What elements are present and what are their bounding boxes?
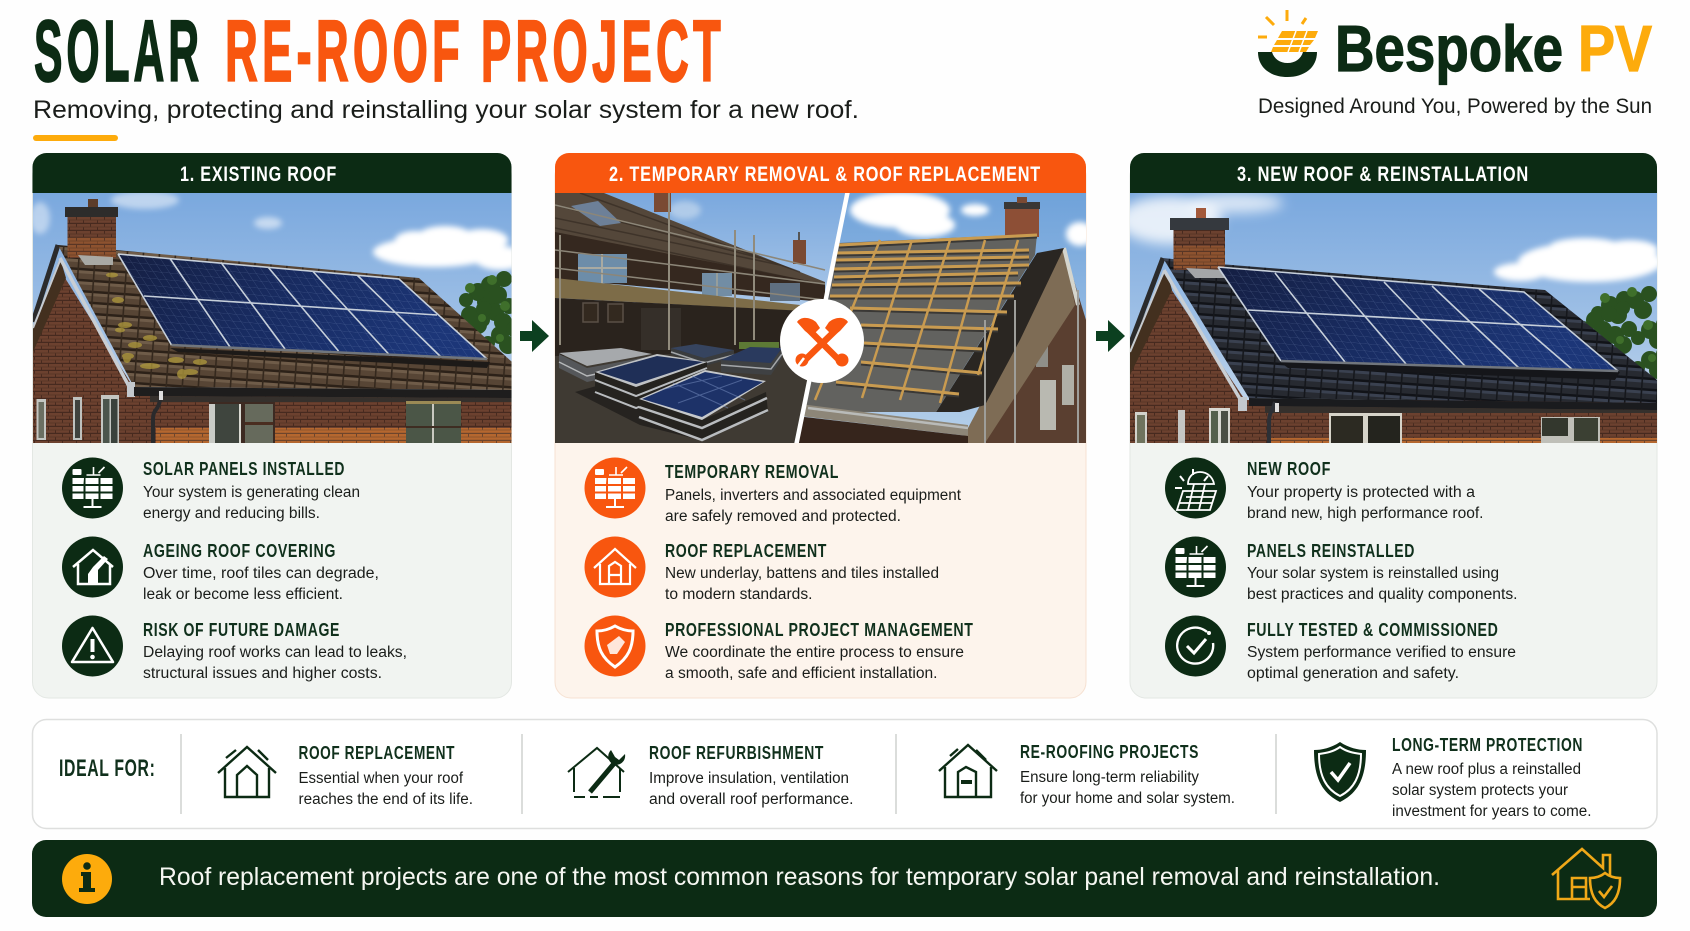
arrow: step 1 to 2 [520,320,549,352]
feature: risk of future damage [62,616,407,682]
panel 2: temporary removal and roof replacement [555,153,1094,698]
feature: roof replacement: to modern standards. [665,586,812,603]
panel 1 body [32,160,512,698]
item: long-term protection: solar system protects your [1392,782,1568,799]
accent bar [33,135,118,141]
feature: ageing roof covering: leak or become less efficient. [143,586,343,603]
feature: fully tested and commissioned: FULLY TESTED & COMMISSIONED [1247,620,1498,640]
item: roof refurbishment: Improve insulation, ventilation [649,770,849,787]
item: re-roofing projects [939,741,1235,807]
panel 3: new roof and reinstallation [1118,153,1672,698]
panel 1 header [32,153,512,193]
item: roof replacement: Essential when your roof [298,770,464,787]
photo: removal and new battens [555,190,1094,446]
panel 2 header [555,153,1086,193]
panel 1 header: 1. EXISTING ROOF [180,163,337,186]
ideal for label: IDEAL FOR: [59,755,156,782]
feature: temporary removal [584,458,962,525]
item: re-roofing projects: Ensure long-term reliability [1020,769,1199,786]
icon: info [62,854,112,904]
icon: crossed tools [796,318,848,366]
item: re-roofing projects: RE-ROOFING PROJECTS [1020,741,1199,762]
feature: ageing roof covering: Over time, roof tiles can degrade, [143,565,379,582]
shadows on the ground [576,386,694,438]
item: re-roofing projects: for your home and solar system. [1020,790,1235,807]
feature: fully tested and commissioned: System performance verified to ensure [1247,644,1516,661]
feature: solar panels installed: energy and reducing bills. [143,505,320,522]
features: panel 1 [62,458,407,682]
feature: new roof: NEW ROOF [1247,459,1331,479]
tagline: Designed Around You, Powered by the Sun [1258,95,1652,118]
icon: sun over panel [1258,10,1318,77]
banner message: Roof replacement projects are one of the most common reasons for temporary solar panel removal and reinstallation. [159,863,1440,891]
item: roof replacement: ROOF REPLACEMENT [298,742,455,763]
wordmark: PV [1578,12,1652,85]
info banner [32,840,1657,917]
feature: solar panels installed: Your system is generating clean [143,484,360,501]
feature: professional project management [584,616,974,682]
photo: new roof with panels reinstalled [1118,193,1672,443]
feature: risk of future damage: Delaying roof works can lead to leaks, [143,644,407,661]
title [34,3,725,100]
feature: panels reinstalled: PANELS REINSTALLED [1247,541,1415,561]
feature: panels reinstalled: best practices and quality components. [1247,586,1518,603]
panel 2 body [555,160,1086,698]
item: roof refurbishment: ROOF REFURBISHMENT [649,742,824,763]
panel 3 header [1130,153,1657,193]
features: panel 3 [1165,458,1518,682]
item: roof replacement [218,742,473,808]
panel 3 body [1130,160,1657,698]
feature: temporary removal: TEMPORARY REMOVAL [665,462,839,482]
panel 3 header: 3. NEW ROOF & REINSTALLATION [1237,163,1529,186]
feature: temporary removal: Panels, inverters and associated equipment [665,487,962,504]
feature: fully tested and commissioned [1165,616,1516,682]
features: panel 2 [584,458,974,682]
feature: new roof [1165,458,1484,522]
ideal for strip [32,720,1657,828]
feature: professional project management: We coordinate the entire process to ensure [665,644,964,661]
feature: panels reinstalled: Your solar system is reinstalled using [1247,565,1499,582]
photo: existing roof with solar panels [30,191,526,443]
feature: ageing roof covering: AGEING ROOF COVERING [143,541,336,561]
subtitle: Removing, protecting and reinstalling your solar system for a new roof. [33,96,859,124]
feature: professional project management: PROFESSIONAL PROJECT MANAGEMENT [665,620,974,640]
feature: roof replacement [584,536,939,603]
feature: ageing roof covering [62,536,379,603]
feature: risk of future damage: structural issues and higher costs. [143,665,382,682]
item: long-term protection: A new roof plus a reinstalled [1392,761,1581,778]
feature: new roof: Your property is protected with a [1247,484,1475,501]
item: long-term protection: investment for years to come. [1392,803,1592,820]
arrow: step 2 to 3 [1096,320,1125,352]
title: RE-ROOF PROJECT [225,3,725,100]
feature: risk of future damage: RISK OF FUTURE DAMAGE [143,620,340,640]
item: long-term protection [1314,734,1592,820]
feature: panels reinstalled [1165,536,1518,603]
feature: fully tested and commissioned: optimal generation and safety. [1247,665,1459,682]
feature: temporary removal: are safely removed and protected. [665,508,901,525]
icon: house with shield [1552,849,1620,908]
feature: solar panels installed [62,458,360,522]
feature: professional project management: a smooth, safe and efficient installation. [665,665,938,682]
feature: new roof: brand new, high performance roof. [1247,505,1484,522]
item: roof refurbishment: and overall roof performance. [649,791,854,808]
panel 2 header: 2. TEMPORARY REMOVAL & ROOF REPLACEMENT [609,163,1041,186]
feature: roof replacement: New underlay, battens and tiles installed [665,565,939,582]
item: roof replacement: reaches the end of its life. [298,791,473,808]
item: long-term protection: LONG-TERM PROTECTION [1392,734,1583,755]
item: roof refurbishment [568,742,854,808]
panel 1: existing roof [30,153,526,698]
title: SOLAR [34,3,203,100]
logo: Bespoke PV [1258,10,1652,118]
feature: solar panels installed: SOLAR PANELS INSTALLED [143,459,345,479]
wordmark: Bespoke [1335,12,1563,85]
feature: roof replacement: ROOF REPLACEMENT [665,541,827,561]
